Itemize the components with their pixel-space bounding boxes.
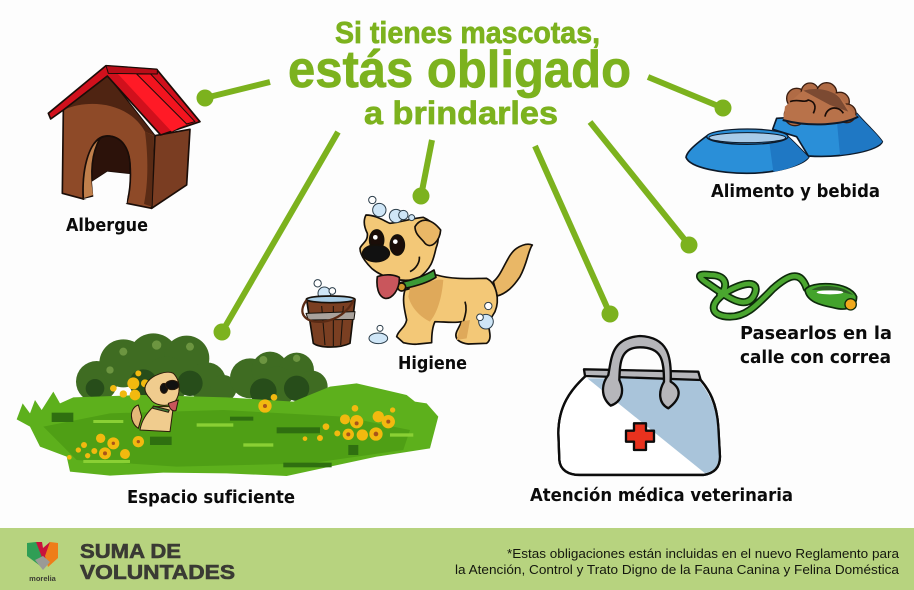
title — [288, 15, 631, 131]
sub: small dog — [131, 372, 179, 432]
sub: eyes and nose — [370, 230, 384, 250]
connector: espacio suficiente — [214, 132, 338, 340]
connector: atencion medica — [535, 146, 618, 322]
title: a brindarles — [364, 95, 558, 131]
label: espacio suficiente: Espacio suficiente — [127, 487, 295, 508]
logo text: suma de voluntades — [80, 541, 235, 584]
connector: higiene — [412, 140, 432, 204]
icon: meadow with bushes, flowers and dog — [17, 333, 438, 476]
logo: morelia heart: morelia — [29, 574, 57, 583]
label: higiene: Higiene — [398, 353, 467, 374]
logo text: suma de voluntades: SUMA DE — [80, 541, 181, 563]
logo: morelia heart — [27, 542, 58, 583]
logo text: suma de voluntades: VOLUNTADES — [80, 562, 235, 584]
label: pasearlos en la calle con correa: calle con correa — [740, 347, 891, 368]
label: alimento y bebida: Alimento y bebida — [711, 181, 880, 202]
label: atencion medica veterinaria: Atención médica veterinaria — [530, 485, 793, 506]
sub: bubbles — [314, 196, 493, 344]
footnote — [455, 546, 900, 577]
icon: veterinary bag — [558, 336, 720, 475]
title: estás obligado — [288, 41, 631, 99]
label: pasearlos en la calle con correa — [740, 323, 892, 368]
footer band — [0, 528, 914, 590]
sub: bushes — [76, 333, 328, 407]
connector: albergue — [196, 82, 270, 106]
connector: pasearlos — [590, 122, 698, 254]
icon: dog with bucket and bubbles — [302, 196, 532, 347]
sub: bucket — [307, 300, 355, 347]
sub: head — [360, 215, 438, 280]
sub: flowers — [67, 370, 395, 460]
sub: body and legs — [397, 275, 497, 344]
sub: grass — [17, 383, 438, 476]
sub: tail — [493, 244, 532, 296]
icon: green leash — [700, 275, 857, 317]
label: pasearlos en la calle con correa: Pasearlos en la — [740, 323, 892, 344]
footnote: *Estas obligaciones están incluidas en el nuevo Reglamento para — [507, 546, 900, 561]
sub: collar and tongue — [400, 270, 436, 288]
label: albergue: Albergue — [66, 215, 148, 236]
icon: dog house — [48, 66, 200, 208]
footnote: la Atención, Control y Trato Digno de la Fauna Canina y Felina Doméstica — [455, 562, 900, 577]
connector: alimento — [648, 77, 732, 116]
title: Si tienes mascotas, — [335, 15, 600, 50]
icon: food and water bowls — [686, 83, 882, 173]
